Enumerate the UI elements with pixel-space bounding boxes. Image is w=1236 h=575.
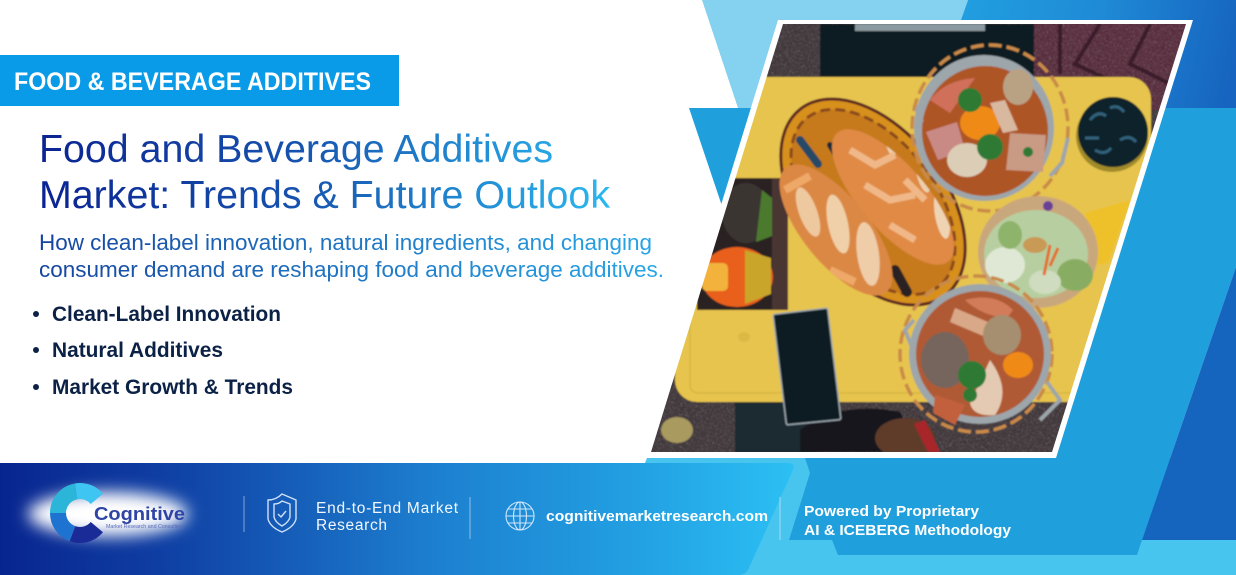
soup pot top xyxy=(912,45,1068,211)
feature text: end-to-end research xyxy=(316,500,459,534)
divider three xyxy=(780,497,781,540)
website url: cognitivemarketresearch.com xyxy=(546,508,768,525)
background shapes xyxy=(640,0,1236,575)
dark clothing at top xyxy=(820,24,1034,78)
icon: globe xyxy=(506,502,534,530)
powered by text: Powered by Proprietary xyxy=(804,503,980,520)
bread left xyxy=(778,164,894,296)
title: Market: Trends & Future Outlook xyxy=(39,174,610,217)
logo: Cognitive xyxy=(94,503,185,524)
icon: shield with check xyxy=(268,494,296,532)
feature text: end-to-end research: Research xyxy=(316,517,387,534)
title: Food and Beverage Additives xyxy=(39,128,553,171)
bullet list: Market Growth & Trends xyxy=(52,376,293,399)
subtitle: consumer demand are reshaping food and beverage additives. xyxy=(39,257,664,282)
drink cup xyxy=(1076,97,1148,172)
yellow table xyxy=(675,77,1151,402)
logo xyxy=(28,491,188,536)
smartphone xyxy=(775,310,839,423)
bread basket xyxy=(778,96,968,308)
bullet list: Clean-Label Innovation xyxy=(52,303,281,326)
condiment box and bottles xyxy=(697,178,788,310)
salad plate xyxy=(978,196,1098,308)
yellow paper xyxy=(1085,200,1130,265)
footer bar xyxy=(0,463,794,575)
powered by text xyxy=(804,503,1012,539)
soup pot bottom xyxy=(900,276,1060,432)
subtitle xyxy=(39,230,664,282)
feature text: end-to-end research: End-to-End Market xyxy=(316,500,459,517)
bullet list: Natural Additives xyxy=(52,339,223,362)
divider one xyxy=(244,496,245,532)
divider two xyxy=(470,497,471,539)
pavement ground xyxy=(640,20,1200,460)
feet and bags at bottom xyxy=(661,402,940,458)
logo: Market Research and Consulting xyxy=(106,524,183,530)
bread right xyxy=(830,128,955,266)
photo: table of food in white parallelogram frame xyxy=(640,20,1200,460)
subtitle: How clean-label innovation, natural ingredients, and changing xyxy=(39,230,652,255)
powered by text: AI & ICEBERG Methodology xyxy=(804,522,1012,539)
badge: category label: FOOD & BEVERAGE ADDITIVES xyxy=(14,68,371,96)
title xyxy=(39,128,610,217)
badge: category label xyxy=(0,55,399,106)
bullet list xyxy=(33,303,293,399)
